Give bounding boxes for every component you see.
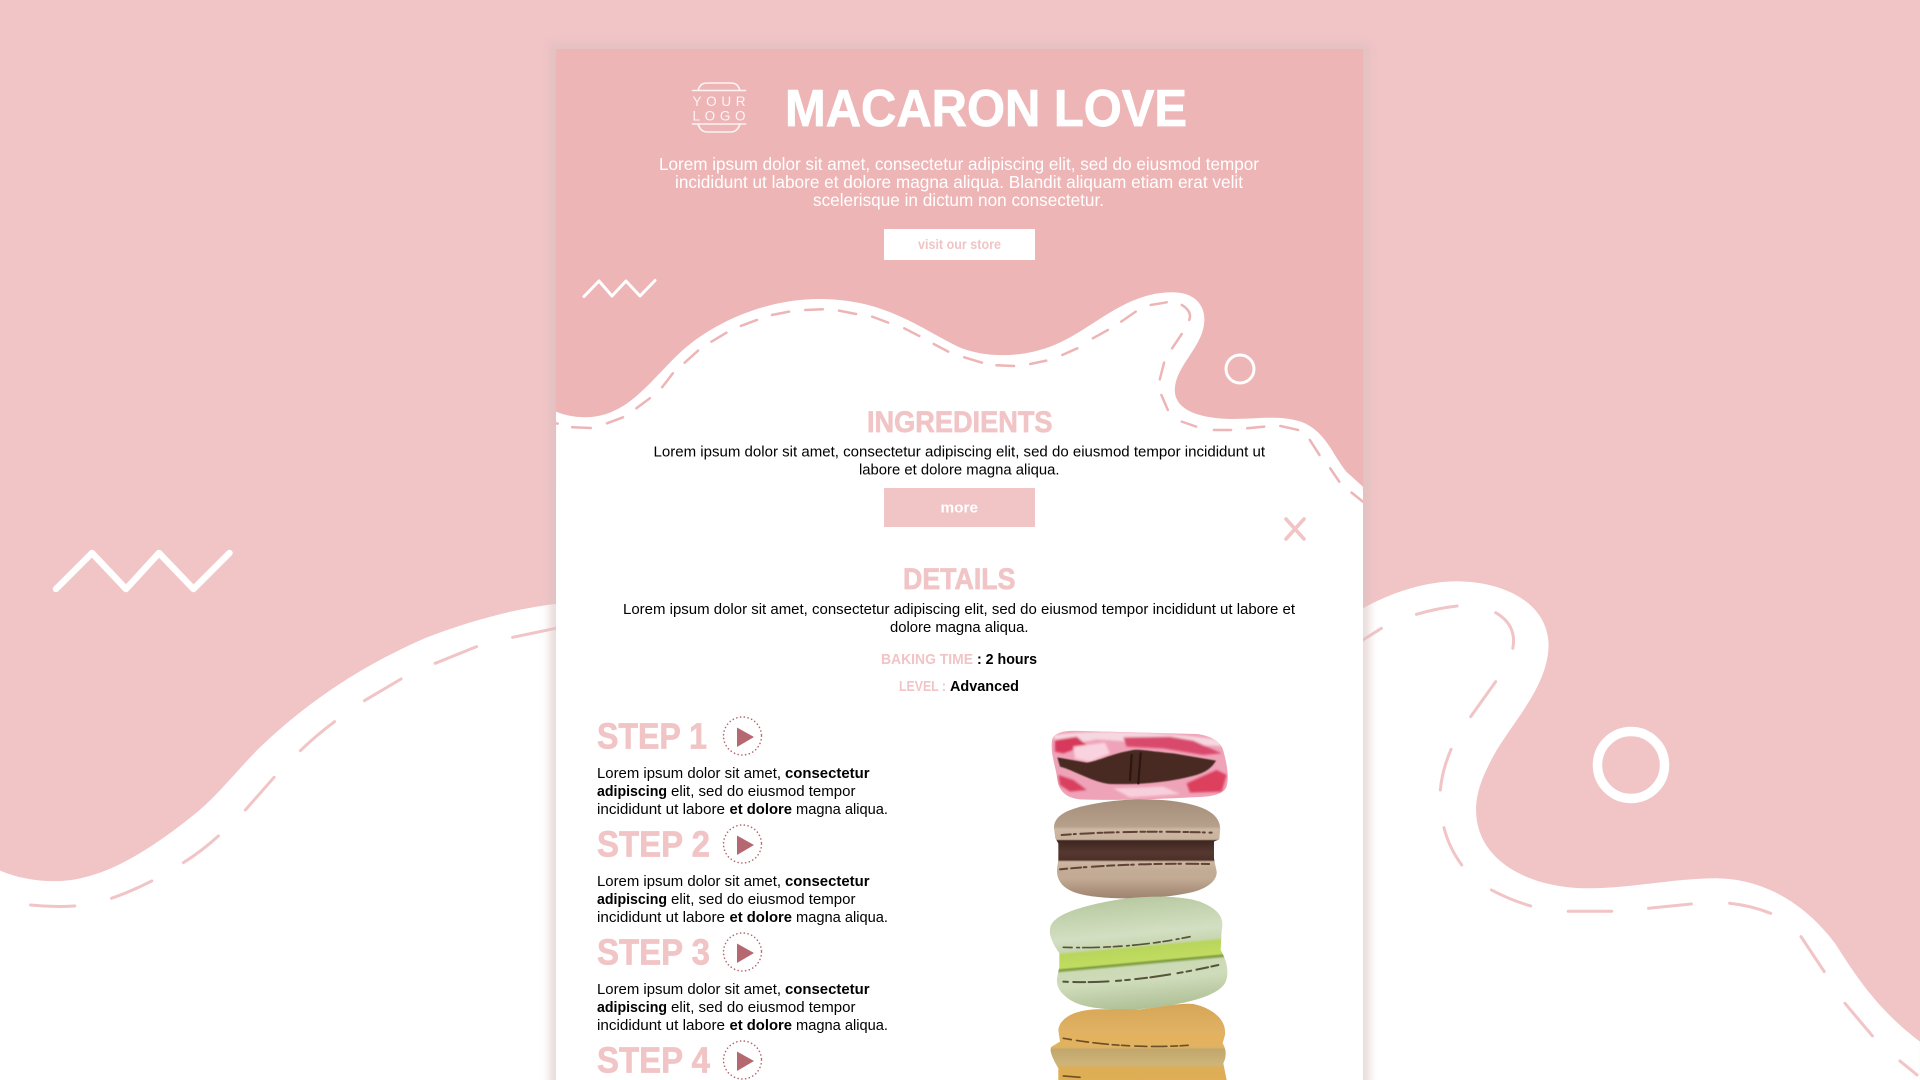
- step 3: adipiscing: [597, 999, 667, 1016]
- logo: YOUR: [692, 94, 746, 109]
- ingredients text: labore et dolore magna aliqua.: [859, 462, 1060, 479]
- button: visit our store: [884, 229, 1035, 260]
- intro text: Lorem ipsum dolor sit amet, consectetur adipiscing elit, sed do eiusmod tempor: [659, 154, 1259, 174]
- button: visit our store: visit our store: [918, 237, 1001, 252]
- step 2: adipiscing: [597, 891, 667, 908]
- heading: ingredients: INGREDIENTS: [867, 406, 1052, 439]
- ingredients text: Lorem ipsum dolor sit amet, consectetur adipiscing elit, sed do eiusmod tempor incididunt ut: [654, 444, 1266, 461]
- level: LEVEL :: [899, 678, 946, 695]
- baking time: [882, 653, 1036, 664]
- decoration: small zigzag: [584, 280, 655, 296]
- step 3: STEP 3: [597, 932, 710, 972]
- step 1: consectetur: [785, 765, 870, 782]
- details text: Lorem ipsum dolor sit amet, consectetur adipiscing elit, sed do eiusmod tempor incididunt ut labore et: [623, 601, 1296, 618]
- green macaron: [1050, 897, 1227, 1010]
- step 1: STEP 1: [597, 716, 707, 757]
- step 1: Lorem ipsum dolor sit amet,: [597, 765, 781, 782]
- decoration: large zigzag: [56, 553, 230, 589]
- level: Advanced: [950, 678, 1019, 695]
- step 3: [597, 932, 888, 1034]
- step 2: et dolore: [730, 909, 792, 926]
- step 2: Lorem ipsum dolor sit amet,: [597, 873, 781, 890]
- step 2: elit, sed do eiusmod tempor: [671, 891, 856, 908]
- illustration: macaron stack: [1048, 728, 1232, 1080]
- title: MACARON LOVE: [785, 80, 1187, 138]
- yellow macaron: [1051, 1004, 1227, 1080]
- step 1: [597, 716, 888, 818]
- heading: details: DETAILS: [903, 563, 1016, 596]
- ingredients text: [654, 444, 1266, 479]
- step 3: incididunt ut labore: [597, 1017, 725, 1034]
- step 3: Lorem ipsum dolor sit amet,: [597, 981, 781, 998]
- card shadow: [549, 43, 1370, 1080]
- left white wave with stitching: [0, 603, 560, 1080]
- step 1: adipiscing: [597, 783, 667, 800]
- logo: [692, 83, 746, 132]
- step 3: et dolore: [730, 1017, 792, 1034]
- logo: LOGO: [692, 108, 746, 124]
- step 4: STEP 4: [597, 1040, 710, 1080]
- brown macaron: [1054, 799, 1220, 898]
- panel: pink header: [556, 49, 1363, 520]
- decoration: small ring: [1226, 355, 1254, 383]
- intro text: incididunt ut labore et dolore magna aliqua. Blandit aliquam etiam erat velit: [675, 172, 1243, 192]
- panel: flyer card: [556, 49, 1363, 1080]
- step 2: STEP 2: [597, 824, 710, 864]
- decoration: cross: [1286, 519, 1304, 539]
- step 1: magna aliqua.: [796, 801, 888, 818]
- intro text: scelerisque in dictum non consectetur.: [813, 190, 1104, 210]
- step 3: consectetur: [785, 981, 870, 998]
- step 1: elit, sed do eiusmod tempor: [671, 783, 856, 800]
- button: more: [884, 488, 1035, 527]
- step 2: magna aliqua.: [796, 909, 888, 926]
- right white wave with stitching: [1360, 581, 1920, 1080]
- level: [900, 680, 1018, 691]
- pink macaron: [1048, 728, 1232, 802]
- decoration: large ring: [1598, 732, 1664, 798]
- step 1: incididunt ut labore: [597, 801, 725, 818]
- step 1: et dolore: [730, 801, 792, 818]
- intro text: [659, 154, 1259, 210]
- step 3: elit, sed do eiusmod tempor: [671, 999, 856, 1016]
- step 2: consectetur: [785, 873, 870, 890]
- details text: [623, 601, 1296, 636]
- step 3: magna aliqua.: [796, 1017, 888, 1034]
- baking time: BAKING TIME: [881, 651, 973, 668]
- button: more: more: [940, 500, 978, 517]
- details text: dolore magna aliqua.: [890, 619, 1028, 636]
- baking time: : 2 hours: [977, 651, 1037, 668]
- step 2: [597, 824, 888, 926]
- step 2: incididunt ut labore: [597, 909, 725, 926]
